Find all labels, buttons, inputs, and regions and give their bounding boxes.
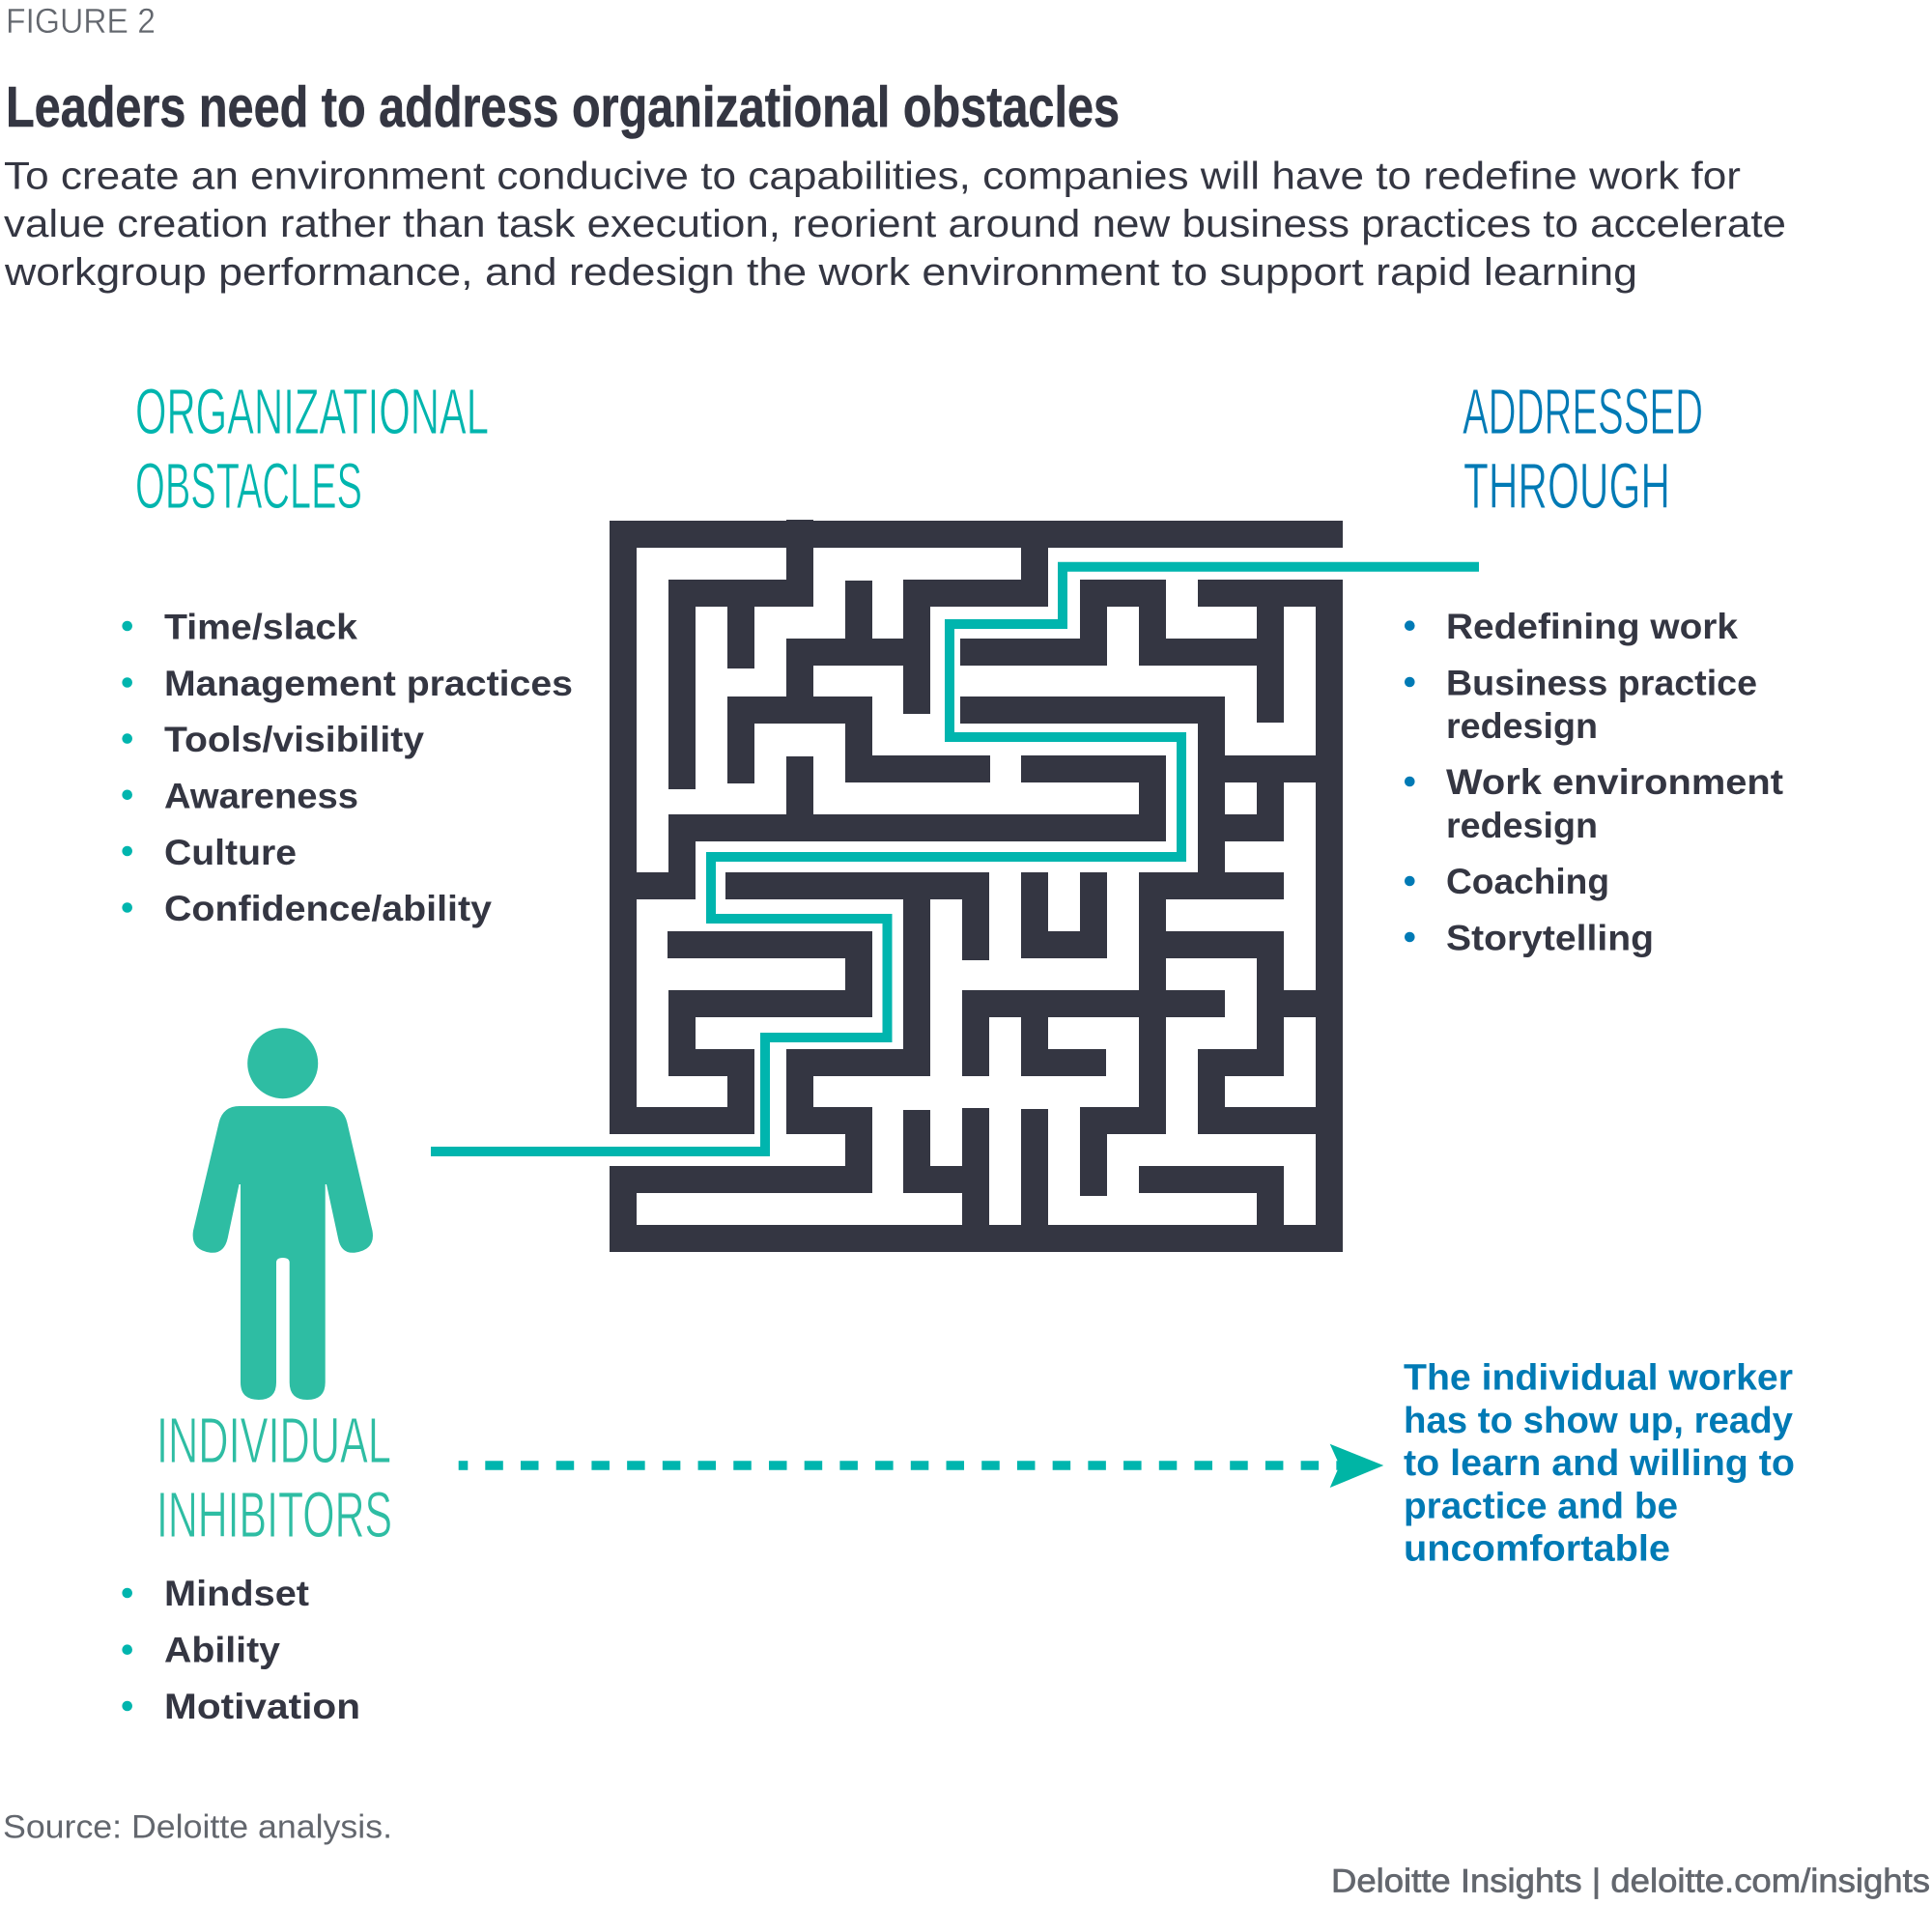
list: organizational obstacles: Time/slack — [164, 607, 357, 647]
intro paragraph: To create an environment conducive to capabilities, companies will have to redefine work for — [4, 155, 1741, 197]
heading: individual inhibitors: INDIVIDUAL — [156, 1405, 391, 1477]
callout: uncomfortable — [1404, 1528, 1670, 1569]
callout: The individual worker — [1404, 1358, 1793, 1399]
callout: to learn and willing to — [1404, 1443, 1795, 1484]
list: organizational obstacles: Awareness — [164, 775, 358, 815]
callout: has to show up, ready — [1404, 1401, 1793, 1441]
list: organizational obstacles: Management practices — [164, 663, 573, 703]
intro paragraph: value creation rather than task execution, reorient around new business practices to accelerate — [4, 203, 1786, 245]
heading: organizational obstacles: ORGANIZATIONAL — [135, 376, 489, 448]
icon: person — [193, 1028, 373, 1400]
list: addressed through: Business practice — [1446, 663, 1757, 703]
figure label: FIGURE 2 — [6, 1, 156, 41]
list: individual inhibitors: Ability — [164, 1630, 280, 1670]
heading: individual inhibitors: INHIBITORS — [156, 1479, 392, 1551]
maze — [610, 520, 1343, 1252]
heading: organizational obstacles — [135, 376, 489, 523]
list: addressed through: Coaching — [1446, 861, 1609, 901]
list: addressed through: Redefining work — [1446, 606, 1738, 646]
list: individual inhibitors: Motivation — [164, 1686, 360, 1726]
list: addressed through — [1405, 606, 1784, 958]
list: organizational obstacles — [122, 607, 573, 928]
arrow: dashed line to callout — [459, 1444, 1383, 1488]
source note: Source: Deloitte analysis. — [3, 1808, 392, 1845]
heading: addressed through: ADDRESSED — [1463, 376, 1703, 448]
title: Leaders need to address organizational obstacles — [6, 75, 1120, 139]
list: addressed through: Storytelling — [1446, 918, 1654, 958]
footer credit: Deloitte Insights | deloitte.com/insights — [1331, 1862, 1930, 1899]
heading: addressed through — [1463, 376, 1703, 523]
list: organizational obstacles: Tools/visibility — [164, 719, 424, 759]
callout — [1404, 1358, 1795, 1569]
list: organizational obstacles: Confidence/ability — [164, 888, 492, 928]
list: addressed through: redesign — [1446, 705, 1598, 746]
intro paragraph: workgroup performance, and redesign the work environment to support rapid learning — [4, 251, 1637, 294]
path through maze — [431, 567, 1479, 1152]
list: individual inhibitors — [122, 1573, 360, 1726]
callout: practice and be — [1404, 1486, 1678, 1526]
heading: organizational obstacles: OBSTACLES — [135, 450, 362, 523]
list: individual inhibitors: Mindset — [164, 1573, 310, 1613]
heading: addressed through: THROUGH — [1463, 450, 1670, 523]
list: addressed through: Work environment — [1446, 761, 1784, 802]
heading: individual inhibitors — [156, 1405, 392, 1551]
list: addressed through: redesign — [1446, 805, 1598, 845]
intro paragraph — [4, 155, 1786, 294]
list: organizational obstacles: Culture — [164, 832, 297, 872]
